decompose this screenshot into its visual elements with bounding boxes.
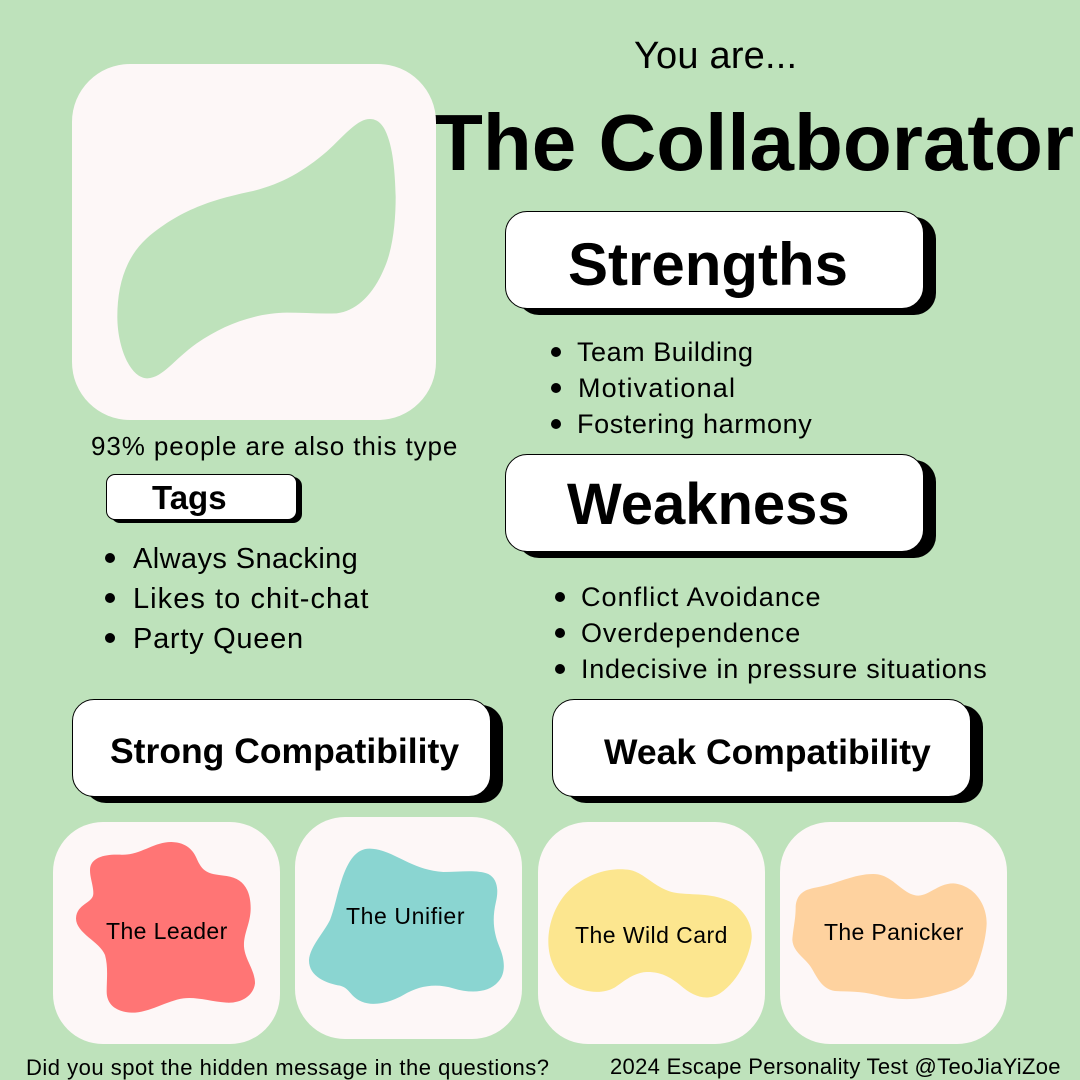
button: Strengths [505, 211, 924, 309]
list: tags: Party Queen [133, 623, 304, 655]
intro text: You are: You are... [634, 35, 797, 77]
button: Tags [106, 474, 297, 520]
list: strengths [551, 337, 812, 439]
list: tags: Likes to chit-chat [133, 583, 370, 615]
list: weaknesses: Indecisive in pressure situations [581, 654, 987, 684]
label: Weakness: Weakness [567, 472, 850, 537]
icon: green blob [117, 119, 396, 378]
icon: orange blob [792, 874, 987, 1000]
footer: hidden message note: Did you spot the hidden message in the questions? [26, 1055, 550, 1080]
list: strengths: Motivational [578, 373, 736, 403]
button: Strong Compatibility [72, 699, 491, 797]
panel: main avatar card [72, 64, 436, 420]
label: Strong Compatibility: Strong Compatibility [110, 731, 459, 771]
list: strengths: Team Building [577, 337, 754, 367]
footer: credit: 2024 Escape Personality Test @TeoJiaYiZoe [610, 1054, 1061, 1079]
list: weaknesses: Overdependence [581, 618, 801, 648]
label: Weak Compatibility: Weak Compatibility [604, 732, 931, 772]
button: Weak Compatibility [552, 699, 971, 797]
panel: The Unifier [295, 817, 522, 1039]
label: The Wild Card: The Wild Card [575, 922, 728, 948]
label: Tags: Tags [152, 479, 227, 516]
caption: population share: 93% people are also this type [91, 431, 458, 461]
panel: The Leader [53, 822, 280, 1044]
panel: The Wild Card [538, 822, 765, 1044]
icon: yellow blob [548, 869, 752, 998]
title: The Collaborator: The Collaborator [434, 98, 1074, 187]
label: The Leader: The Leader [106, 918, 228, 944]
label: The Unifier: The Unifier [346, 903, 465, 929]
list: weaknesses [555, 582, 987, 684]
list: tags [105, 543, 370, 655]
button: Weakness [505, 454, 924, 552]
list: strengths: Fostering harmony [577, 409, 812, 439]
label: The Panicker: The Panicker [824, 919, 964, 945]
list: tags: Always Snacking [133, 543, 358, 575]
list: weaknesses: Conflict Avoidance [581, 582, 822, 612]
label: Strengths: Strengths [568, 231, 848, 298]
icon: teal blob [309, 848, 504, 1004]
panel: The Panicker [780, 822, 1007, 1044]
icon: red blob [76, 842, 255, 1013]
